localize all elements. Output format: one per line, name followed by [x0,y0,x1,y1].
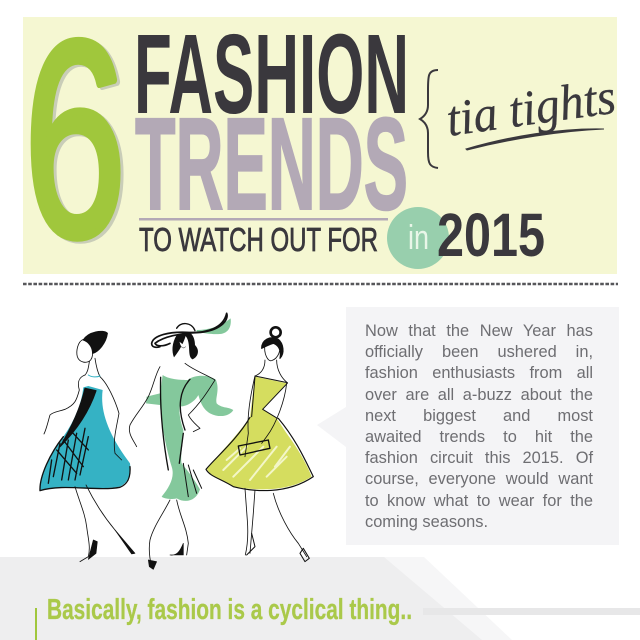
panel: intro background with pointer [317,307,619,545]
figure: teal dress [40,331,135,562]
subheading: to watch out for: TO WATCH OUT FOR [139,221,378,258]
big number 6 [24,0,129,296]
intro paragraph: coming seasons. [365,513,488,531]
heading rule [139,218,388,220]
intro paragraph: next biggest and most [365,407,593,425]
section heading: Basically, fashion is a cyclical thing.. [47,594,412,626]
intro paragraph: awaited trends to hit the [365,428,593,446]
intro paragraph: over are all a-buzz about the [365,386,593,404]
intro paragraph: Now that the New Year has [365,322,593,340]
intro paragraph: fashion enthusiasts from all [365,364,593,382]
dashed divider [23,283,618,285]
intro paragraph: to know what to wear for the [365,492,593,510]
badge: in: in [408,219,429,257]
figure: green dress with hat [129,313,233,569]
panel: header background [23,17,617,274]
heading side bar [423,608,640,615]
logo: tia tights: tia tights [443,68,619,147]
bottom background shapes [0,557,512,640]
intro paragraph: officially been ushered in, [365,343,593,361]
accent bar beside section heading [35,608,37,640]
figure: yellow dress [206,327,313,562]
heading: FASHION: FASHION [134,11,409,137]
brace [420,70,438,168]
intro paragraph: fashion circuit this 2015. Of [365,449,593,467]
year: 2015: 2015 [437,201,545,269]
illustration: three fashion figures [40,313,313,569]
intro paragraph [365,322,594,531]
intro paragraph: course, everyone would want [365,470,593,488]
badge: in [387,207,449,269]
